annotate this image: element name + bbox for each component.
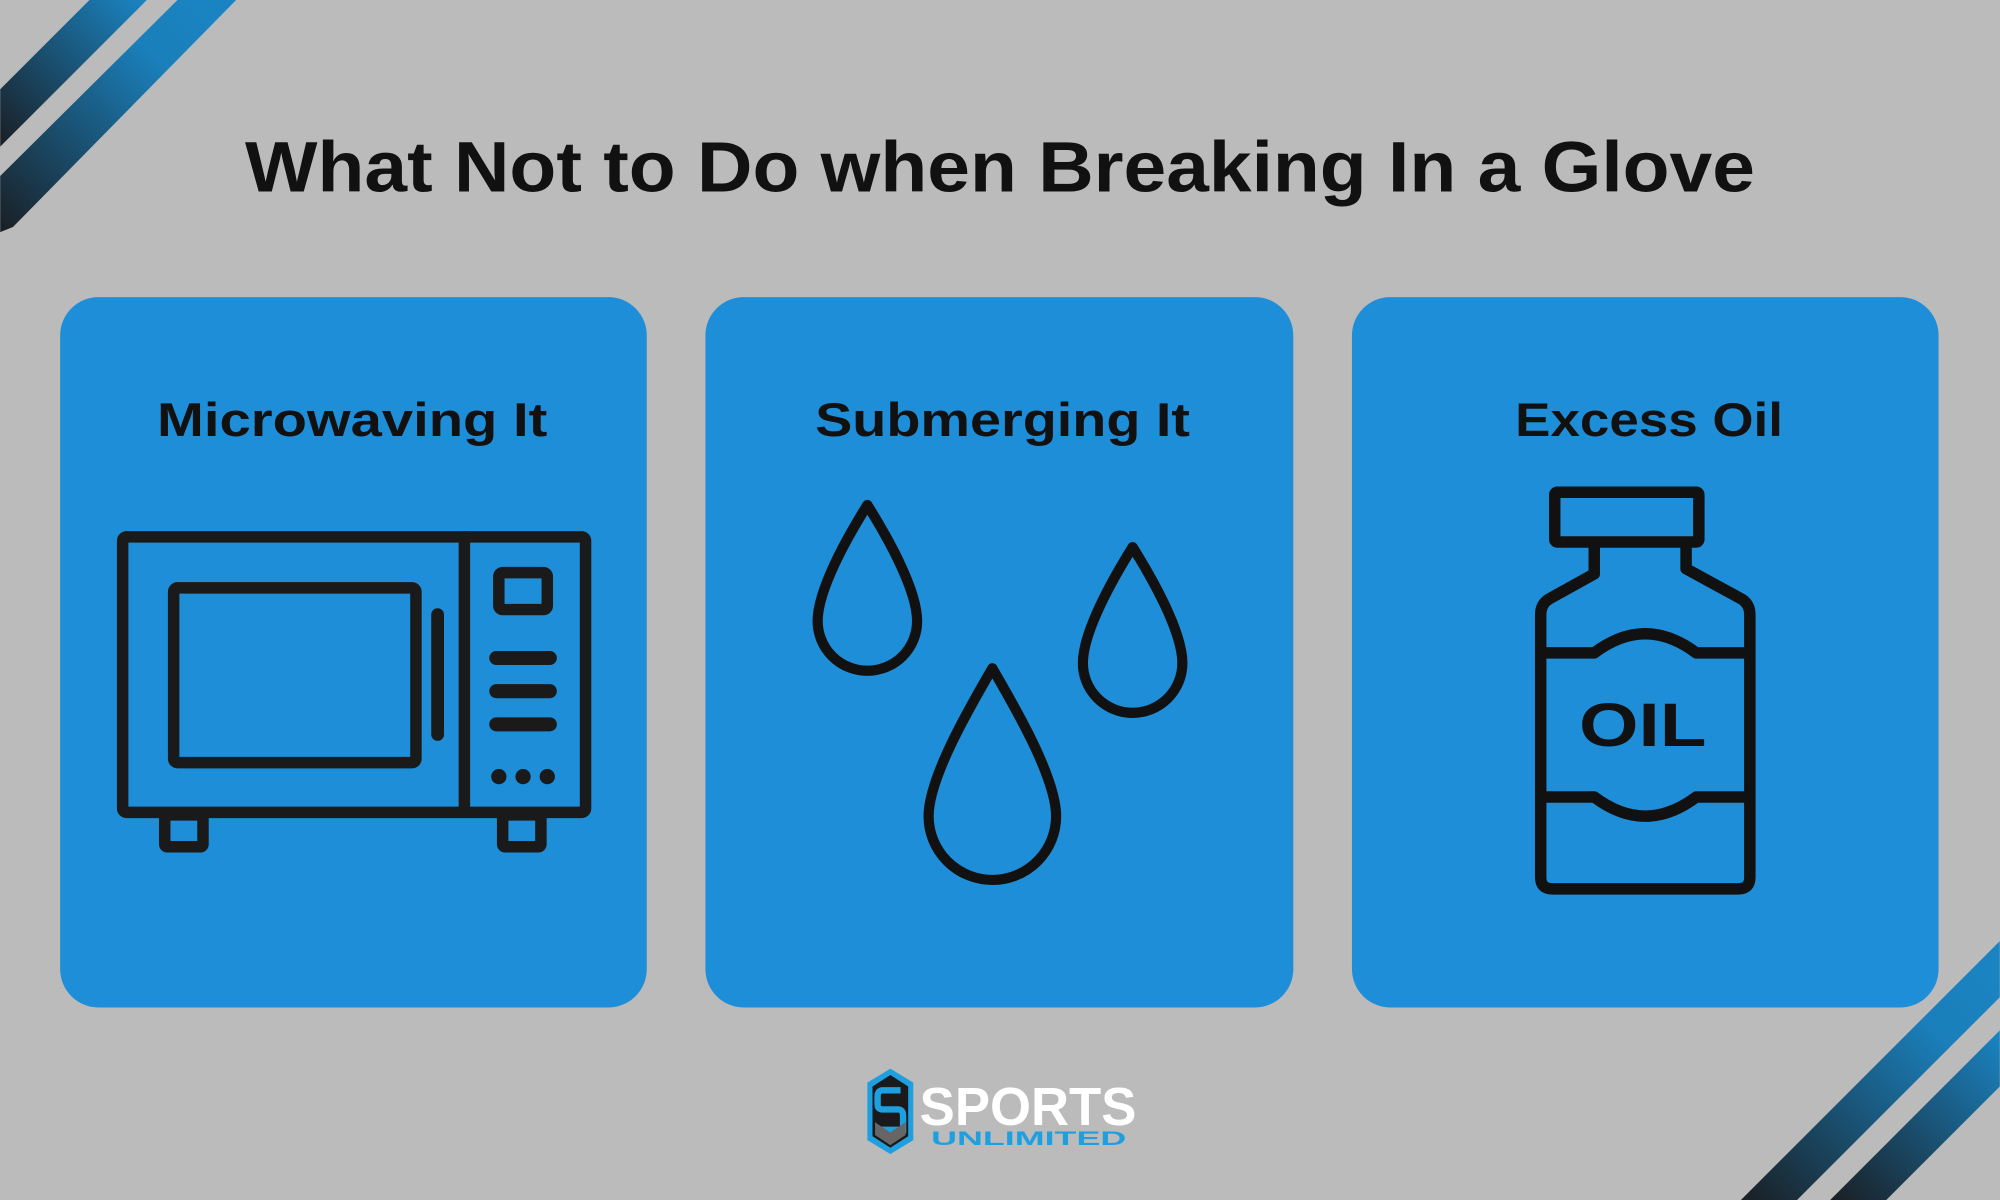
decorative stripes top-left bbox=[0, 0, 236, 232]
icon: microwave bbox=[123, 537, 586, 847]
logo text: SPORTS bbox=[920, 1078, 1136, 1137]
panel title: Microwaving It: Microwaving It bbox=[157, 393, 548, 446]
panel title: Submerging It: Submerging It bbox=[815, 393, 1190, 446]
panel: submerging bbox=[705, 297, 1293, 1007]
icon: oil bottle bbox=[1541, 492, 1750, 889]
panel: microwaving bbox=[60, 297, 647, 1007]
logo: Sports Unlimited: UNLIMITED bbox=[931, 1129, 1126, 1150]
panel title: Excess Oil: Excess Oil bbox=[1515, 393, 1783, 446]
panel: excess oil bbox=[1352, 297, 1939, 1007]
title: What Not to Do when Breaking In a Glove bbox=[245, 127, 1755, 207]
decorative stripes bottom-right bbox=[1741, 941, 2000, 1200]
bottle label: OIL: OIL bbox=[1579, 691, 1706, 759]
logo icon bbox=[867, 1069, 913, 1154]
logo: Sports Unlimited bbox=[867, 1069, 1136, 1154]
icon: water drops bbox=[818, 505, 1182, 880]
